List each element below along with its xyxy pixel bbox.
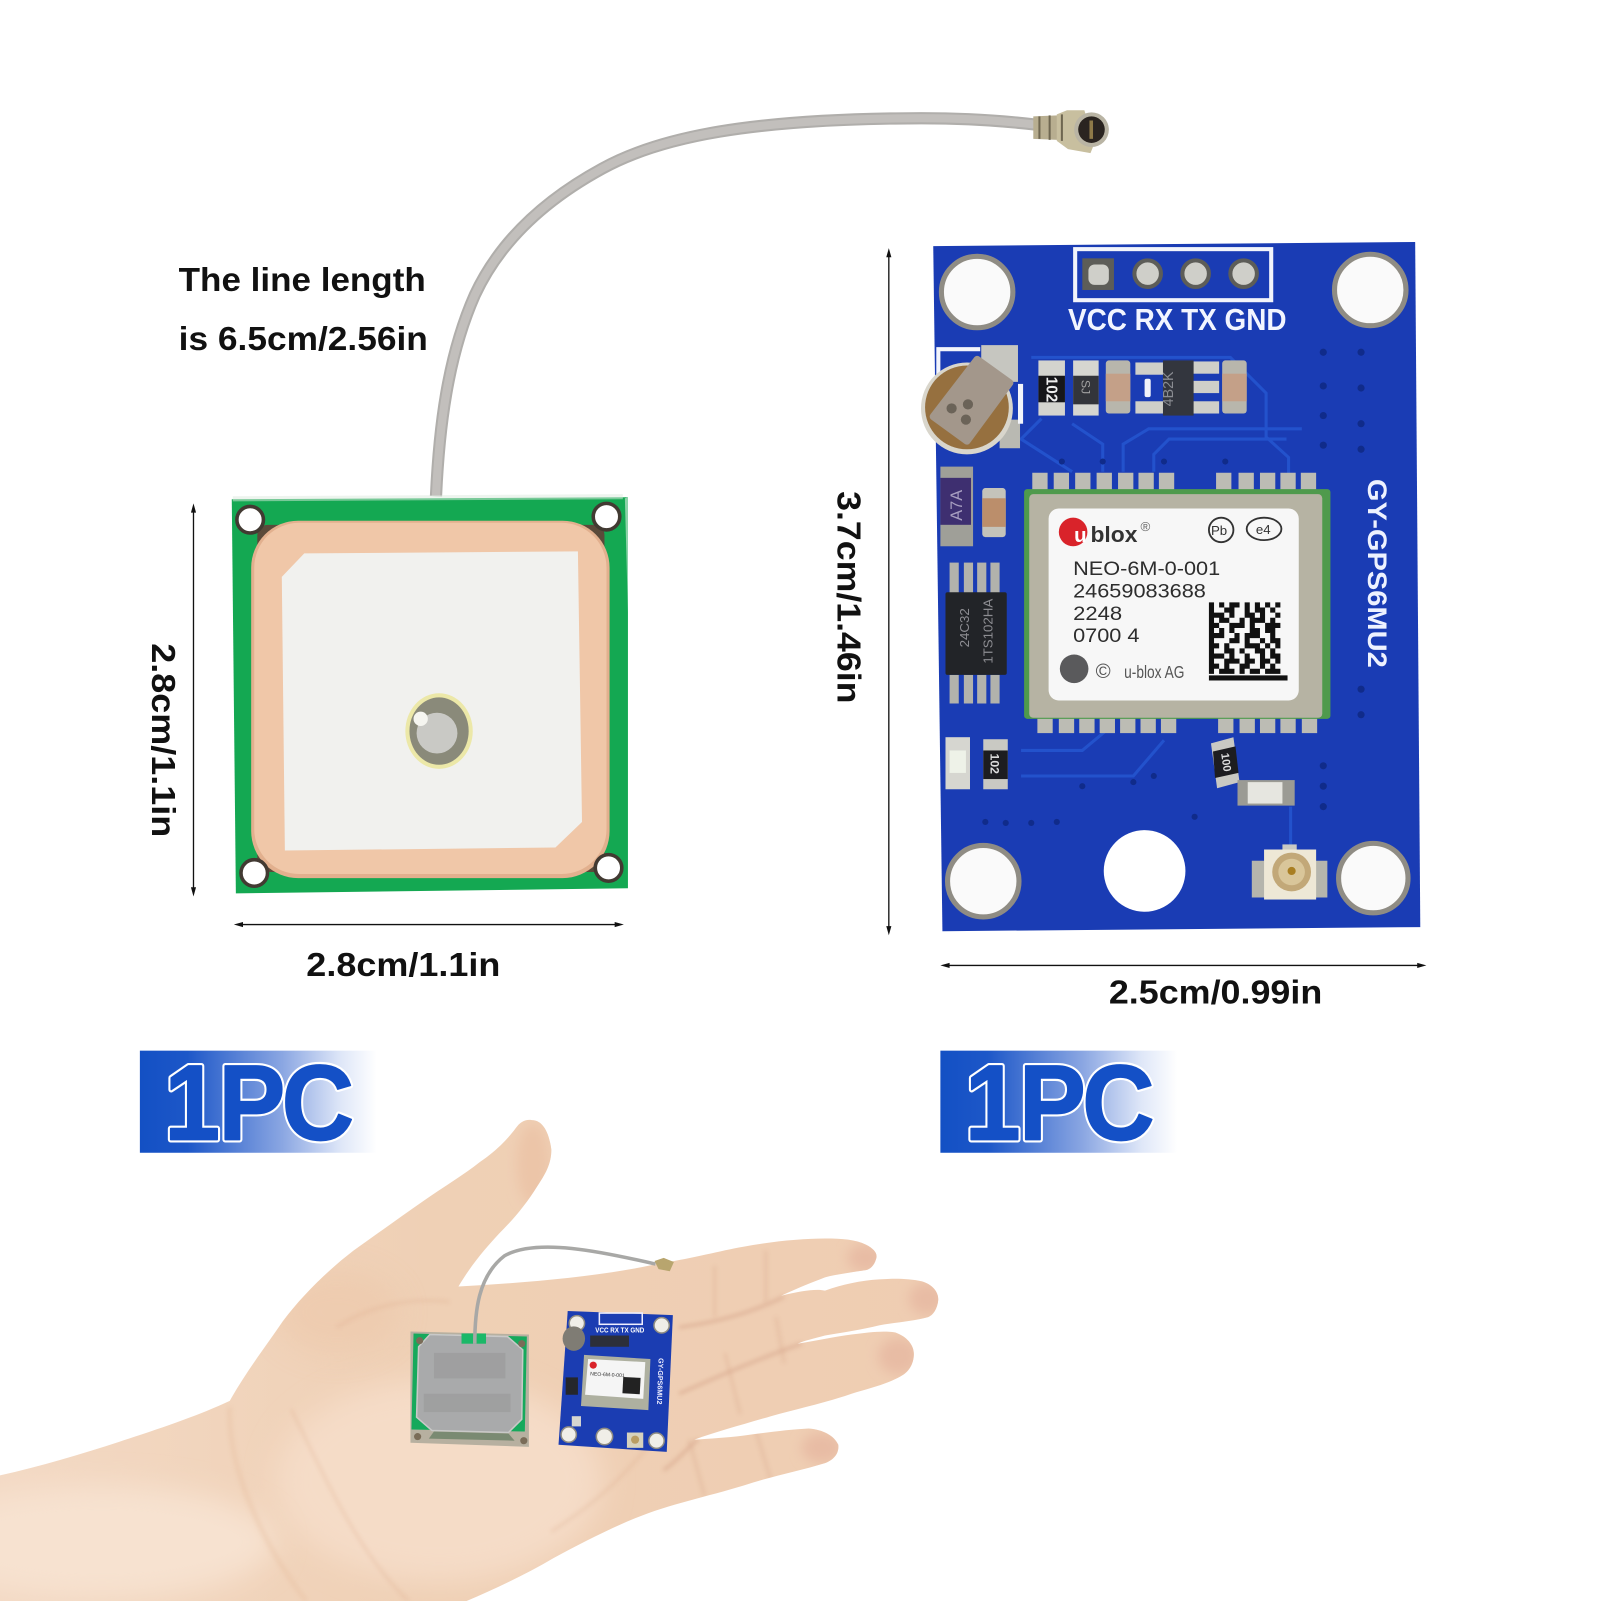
label: board height: 3.7cm/1.46in <box>829 491 866 704</box>
arrow: antenna height <box>191 503 196 896</box>
regulator 4B2K: 4B2K <box>1161 371 1177 406</box>
part numbers: NEO-6M-0-001 <box>1073 558 1220 580</box>
e4 mark <box>1247 518 1281 540</box>
diode SJ: SJ <box>1078 380 1092 394</box>
photo: hand holding modules <box>0 1113 950 1601</box>
capacitor <box>1106 360 1130 414</box>
Pb free mark: Pb <box>1211 523 1227 538</box>
label: antenna width: 2.8cm/1.1in <box>306 947 500 984</box>
small blue board: NEO-6M-0-001 <box>590 1371 625 1379</box>
battery corner outline <box>938 349 980 380</box>
silver pads <box>981 345 1023 448</box>
small cable <box>475 1247 674 1344</box>
heading: line length note: The line length <box>179 262 426 299</box>
resistor 102 <box>1038 360 1065 416</box>
u-blox logo: blox <box>1090 522 1138 547</box>
diode SJ <box>1073 360 1099 416</box>
pin labels: VCC RX TX GND <box>1068 303 1287 337</box>
hand <box>0 1113 950 1601</box>
finger joints <box>692 1399 739 1488</box>
resistor 102 lower <box>983 739 1008 789</box>
heading: line length note: is 6.5cm/2.56in <box>179 321 428 358</box>
label: board width: 2.5cm/0.99in <box>1109 975 1322 1012</box>
NEO module shield <box>1024 489 1330 719</box>
connector socket <box>1074 112 1109 147</box>
wrist shadow <box>230 1407 306 1601</box>
resistor 100 <box>1211 737 1240 788</box>
u-blox logo <box>1059 518 1151 547</box>
finger gaps <box>664 1297 802 1470</box>
heading: line length note <box>179 262 428 358</box>
capacitor right <box>1222 360 1247 414</box>
copyright line <box>1096 661 1184 683</box>
diode A7A: A7A <box>948 490 966 521</box>
board PCB <box>933 242 1420 931</box>
e4 mark: e4 <box>1256 522 1271 537</box>
copyright line: u-blox AG <box>1124 662 1184 682</box>
copper traces <box>1021 357 1302 847</box>
LED <box>945 737 970 789</box>
data matrix code <box>1209 605 1288 678</box>
palm creases <box>300 1426 606 1586</box>
fingertip shading <box>848 1242 876 1272</box>
board mounting holes <box>941 254 1408 917</box>
small blue board: GY-GPS6MU2 <box>655 1358 665 1405</box>
capacitor left <box>982 488 1006 537</box>
EEPROM chip 24C32: 1TS102HA <box>980 599 995 664</box>
NEO module label <box>1049 508 1299 700</box>
resistor 100: 100 <box>1218 752 1233 772</box>
diode A7A <box>940 467 973 546</box>
antenna green PCB <box>232 497 628 893</box>
copyright line: © <box>1096 661 1111 683</box>
panel: blue GPS board <box>921 242 1420 931</box>
EEPROM chip 24C32 <box>945 563 1007 704</box>
backup battery <box>921 359 1013 454</box>
panel: ceramic GPS antenna <box>232 494 628 893</box>
centre hole <box>1104 830 1185 912</box>
part numbers: 2248 <box>1073 603 1122 625</box>
arrow: board height <box>886 248 891 935</box>
badge: left 1PC: 1PC <box>164 1042 354 1162</box>
arrow: board width <box>940 963 1426 968</box>
antenna socket <box>1252 844 1327 900</box>
mounting holes <box>237 503 622 886</box>
part numbers <box>1073 558 1220 647</box>
pin header outline <box>1075 249 1271 300</box>
part numbers: 24659083688 <box>1073 580 1206 602</box>
resistor 102: 102 <box>1043 377 1060 402</box>
label: antenna height: 2.8cm/1.1in <box>144 643 181 837</box>
board model label: GY-GPS6MU2 <box>1362 479 1392 668</box>
grey dot <box>1060 654 1088 683</box>
u-blox logo: ® <box>1141 519 1151 534</box>
resistor 102 lower: 102 <box>987 754 1001 774</box>
u-blox logo: u <box>1074 525 1087 547</box>
Pb free mark <box>1209 518 1233 542</box>
inductor <box>1238 780 1295 806</box>
thumb and palm shading <box>276 1378 602 1583</box>
centre solder point <box>405 693 473 769</box>
vias <box>982 349 1365 826</box>
regulator 4B2K <box>1135 360 1219 416</box>
badge: right 1PC: 1PC <box>965 1042 1155 1162</box>
badge: left 1PC: 1PC <box>164 1042 354 1162</box>
part numbers: 0700 4 <box>1073 625 1140 647</box>
EEPROM chip 24C32: 24C32 <box>957 608 972 647</box>
small blue board: VCC RX TX GND <box>595 1326 644 1334</box>
small antenna module, back <box>410 1331 529 1447</box>
pin header pads <box>1082 258 1257 290</box>
arrow: antenna width <box>234 922 624 927</box>
NEO module solder pads <box>1032 473 1317 733</box>
badge: right 1PC: 1PC <box>965 1042 1155 1162</box>
ceramic patch <box>251 521 610 878</box>
small blue board <box>559 1311 673 1452</box>
white sticker <box>282 551 582 851</box>
connector crimp <box>1033 115 1058 140</box>
antenna cable with connector <box>436 110 1109 496</box>
